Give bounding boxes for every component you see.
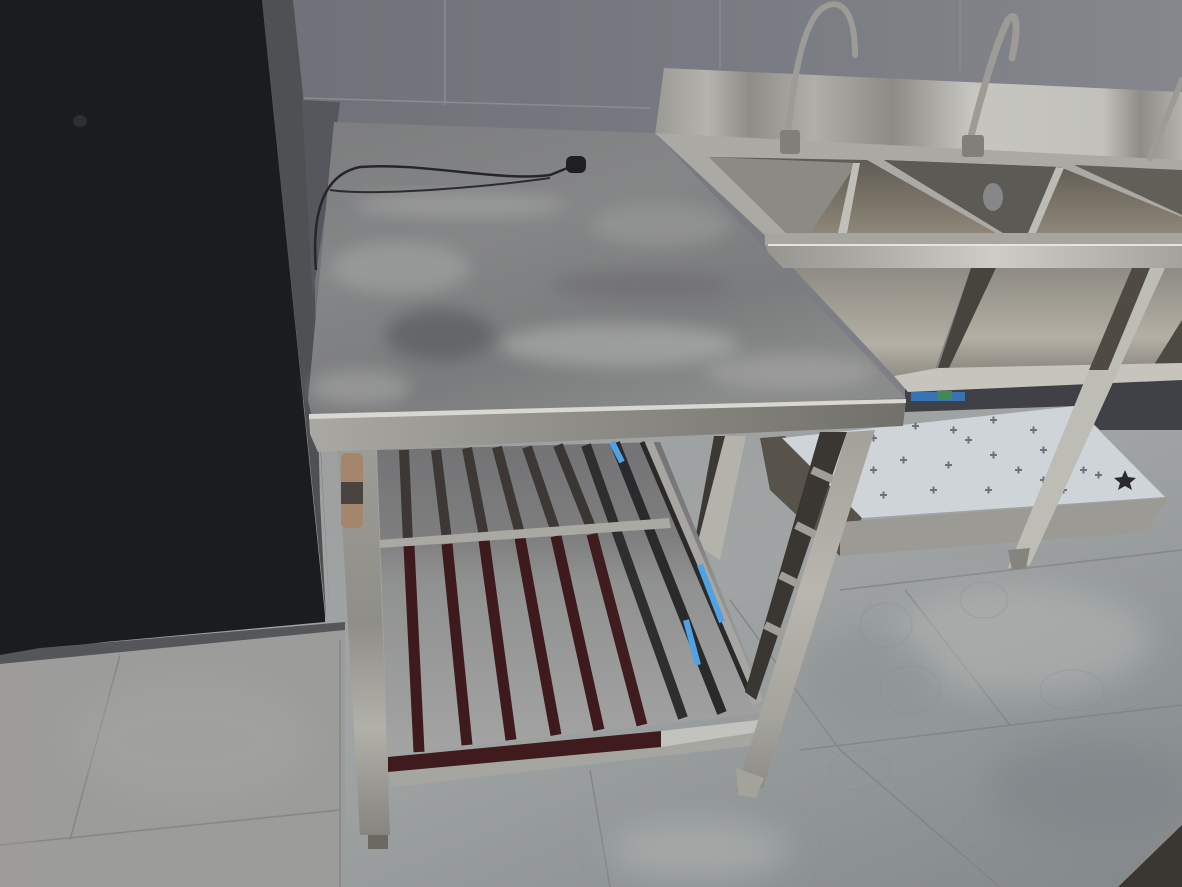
front right table leg [736,430,875,798]
sink underside boxes [793,268,971,378]
sink basin 1 [709,157,996,233]
sink backsplash [655,68,1182,162]
sink front rail [765,233,1182,268]
under-sink tray with star mat [760,406,1168,556]
dark pipes under sink [905,375,1182,430]
black cabinet [0,0,345,664]
smudges on top surface [355,193,565,217]
lower slatted shelf [377,442,770,787]
wall behind table side [302,100,340,620]
shelf front rail [388,720,758,787]
faucet 3 [1150,80,1182,158]
far table leg [695,436,746,560]
wall [0,0,1182,420]
shelf cross bar [379,518,671,548]
table top surface [308,122,906,418]
faucets [780,4,1182,158]
floor [0,400,1182,887]
faucet 1 [780,4,855,154]
shelf background reflections [377,442,770,755]
power cord and plug [315,156,586,270]
shelf slats [404,442,758,752]
sink basin 2 [884,160,1182,233]
blue reflections on slats [612,442,722,665]
sink unit [655,68,1182,430]
sink shelf rail [894,363,1182,392]
sink basin 3 [1074,165,1182,215]
front left table leg [338,450,390,849]
table front edge [309,399,906,452]
faucet 2 [962,17,1016,157]
sink deck [655,133,1182,240]
sink leg [1008,268,1165,570]
